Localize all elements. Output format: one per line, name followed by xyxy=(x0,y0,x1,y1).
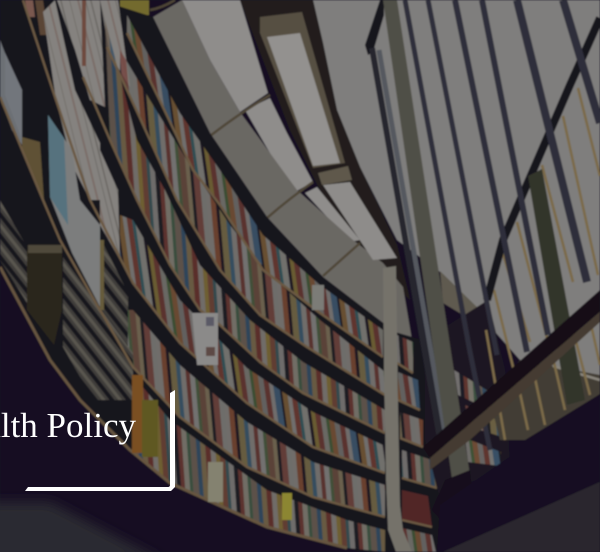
lying book stacks xyxy=(0,200,133,400)
right shelf rows xyxy=(397,335,437,552)
upper rail xyxy=(487,18,600,300)
light fixture 2 xyxy=(318,166,352,185)
book rows xyxy=(105,15,385,552)
display book xyxy=(208,462,223,502)
light fixture 1 xyxy=(260,12,345,168)
tan balusters xyxy=(486,88,600,440)
book row 2 xyxy=(120,50,385,395)
orange book xyxy=(132,375,143,453)
tan beam xyxy=(440,271,483,327)
top-left large books xyxy=(0,0,130,307)
floor glow xyxy=(0,502,165,552)
right lower book rows xyxy=(454,370,501,466)
ceiling: dark recess xyxy=(240,0,410,300)
leaflet on shelf xyxy=(192,313,218,365)
shelf back wall xyxy=(0,0,440,552)
ladder xyxy=(383,266,412,552)
small leaflet xyxy=(312,285,324,310)
ceiling: right panel xyxy=(313,0,600,385)
bracket hook xyxy=(150,0,175,10)
dark frame top xyxy=(365,0,384,55)
far shelving behind rail xyxy=(490,360,600,440)
yellow box xyxy=(120,0,149,15)
dark floor under shelves xyxy=(0,267,360,552)
vertical bars xyxy=(405,0,600,450)
thin poles xyxy=(372,48,448,450)
right lower shaft xyxy=(425,300,510,500)
book row 1 xyxy=(127,15,383,357)
yellow spine xyxy=(282,493,292,520)
yellow patterned book xyxy=(142,400,158,457)
book row 3 xyxy=(105,20,385,433)
handrail xyxy=(423,290,600,470)
main column xyxy=(383,0,470,486)
highlight line xyxy=(553,366,600,380)
post base xyxy=(432,470,472,535)
book row 6 xyxy=(133,375,385,552)
canopy: bright underside xyxy=(182,0,360,242)
canopy: ribs xyxy=(210,95,360,276)
bottom shelf board xyxy=(0,267,347,548)
canopy: front face xyxy=(153,0,412,340)
deck lower face xyxy=(443,482,600,552)
book row 5 xyxy=(128,310,385,517)
corner bracket xyxy=(25,390,175,491)
green-grey column xyxy=(528,169,585,405)
deck xyxy=(437,394,600,552)
book row 4 xyxy=(120,215,385,473)
shelf boards xyxy=(0,0,437,527)
